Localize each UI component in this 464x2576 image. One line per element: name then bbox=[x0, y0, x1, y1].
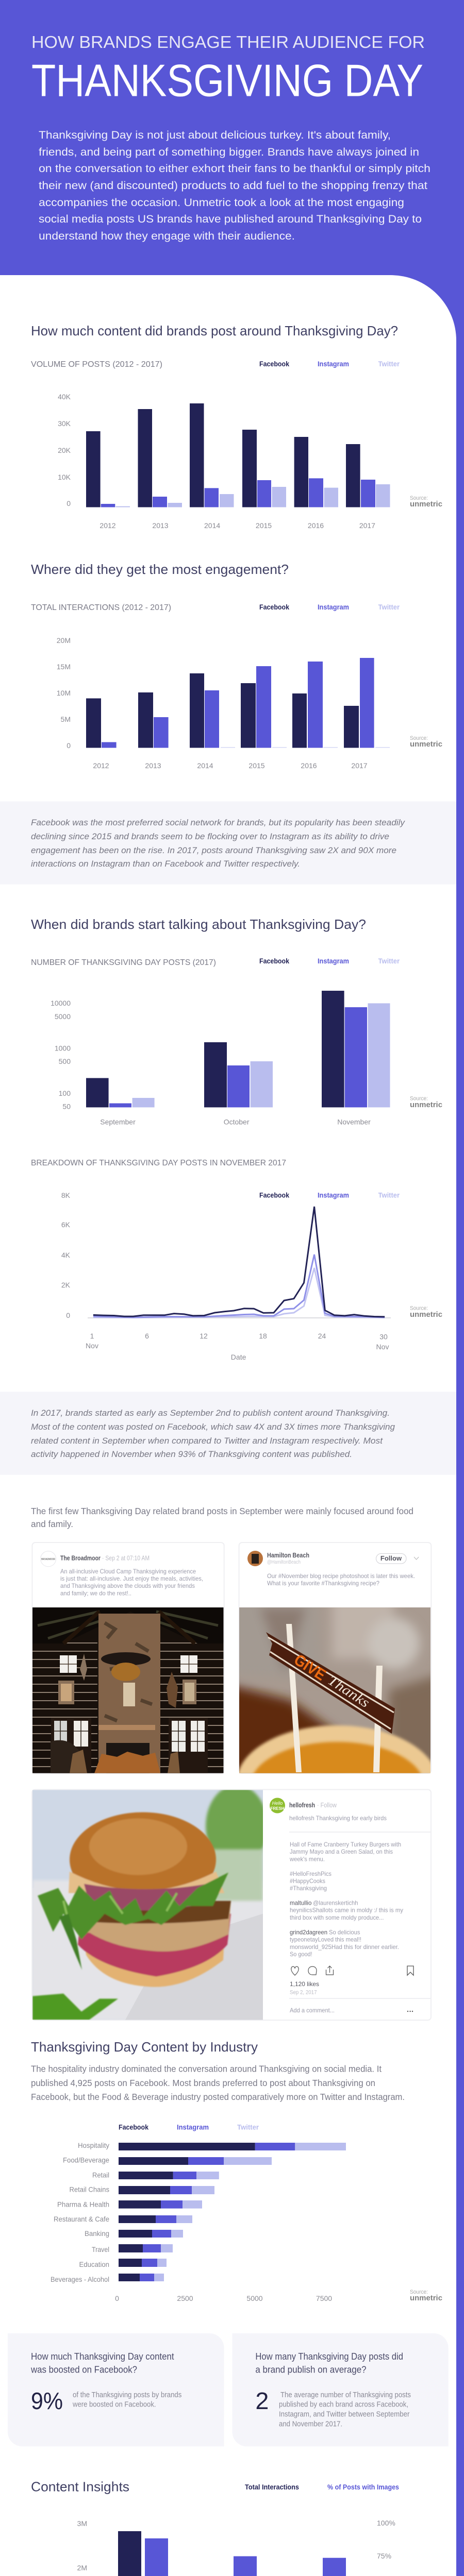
x axis: 2013 bbox=[152, 521, 169, 530]
x axis bbox=[86, 1332, 389, 1361]
x axis: 2012 bbox=[93, 761, 109, 770]
x axis: 2016 bbox=[308, 521, 324, 530]
x axis: 2017 bbox=[351, 761, 368, 770]
comment box: Add a comment... bbox=[290, 2007, 335, 2014]
x axis: 7500 bbox=[316, 2294, 332, 2302]
x axis: 30 bbox=[379, 1332, 388, 1341]
hero intro text: accompanies the occasion. Unmetric took a look at the most engaging bbox=[39, 197, 404, 209]
comments: #HelloFreshPics bbox=[290, 1870, 332, 1877]
post card: The Broadmoor bbox=[32, 1543, 224, 1773]
panel: boosted content bbox=[8, 2333, 224, 2446]
tweet text: What is your favorite #Thanksgiving recipe? bbox=[267, 1580, 379, 1587]
post card: Hamilton Beach bbox=[229, 1543, 440, 1839]
legend bbox=[259, 957, 400, 965]
account name: Hamilton Beach bbox=[267, 1551, 309, 1559]
left y axis: 3M bbox=[77, 2519, 87, 2528]
y axis: 0 bbox=[67, 741, 71, 750]
callout: facebook decline: engagement has been on the rise. In 2017, posts around Thanksgiving saw 2X and 90X more bbox=[31, 845, 396, 855]
legend: Facebook bbox=[259, 603, 289, 611]
heading: by industry: Thanksgiving Day Content by Industry bbox=[31, 2039, 258, 2055]
legend bbox=[259, 603, 400, 611]
y axis: 500 bbox=[59, 1057, 71, 1065]
photo: give thanks pie: GIVE bbox=[291, 1651, 329, 1684]
legend bbox=[245, 2483, 399, 2491]
chart: content insights bbox=[77, 2483, 442, 2576]
hero intro text: on the conversation to either exhort their fans to be thankful or simply pitch bbox=[39, 163, 430, 175]
text: by industry bbox=[31, 2064, 405, 2102]
x axis: 2016 bbox=[301, 761, 317, 770]
chart: content by industry bbox=[51, 2124, 442, 2302]
callout: facebook decline: Facebook was the most preferred social network for brands, but its popularity has been steadily bbox=[31, 818, 406, 827]
post text: An all-inclusive Cloud Camp Thanksgiving experience bbox=[60, 1568, 196, 1575]
stat description: The average number of Thanksgiving posts bbox=[280, 2391, 411, 2399]
category labels: Pharma & Health bbox=[57, 2200, 109, 2208]
stat description: Instagram, and Twitter between September bbox=[279, 2411, 410, 2419]
caption: hellofresh Thanksgiving for early birds bbox=[289, 1815, 387, 1822]
x axis bbox=[100, 1118, 371, 1126]
category labels bbox=[51, 2141, 109, 2283]
stat: 2: 2 bbox=[255, 2387, 269, 2414]
legend: Twitter bbox=[378, 360, 400, 368]
category labels: Retail bbox=[92, 2171, 109, 2179]
chart: breakdown in november bbox=[31, 1159, 442, 1361]
bars bbox=[118, 2531, 346, 2576]
stat description: and November 2017. bbox=[279, 2420, 342, 2429]
panel question: was boosted on Facebook? bbox=[30, 2364, 137, 2375]
legend: Instagram bbox=[318, 603, 349, 611]
source bbox=[410, 735, 442, 749]
likes and date bbox=[290, 1980, 319, 1996]
callout: timing insight bbox=[0, 1392, 456, 1475]
source: Source: bbox=[410, 495, 428, 501]
likes and date: 1,120 likes bbox=[290, 1980, 319, 1988]
account name bbox=[267, 1551, 309, 1565]
category labels: Restaurant & Cafe bbox=[54, 2215, 109, 2223]
heading: content volume: How much content did brands post around Thanksgiving Day? bbox=[31, 323, 398, 338]
panel question bbox=[255, 2351, 403, 2375]
comments: monsworld_925Had this for dinner earlier. bbox=[290, 1943, 399, 1951]
account name: · Follow bbox=[317, 1802, 337, 1809]
x axis bbox=[115, 2294, 332, 2302]
y axis: 40K bbox=[58, 393, 71, 401]
x axis: Date bbox=[231, 1353, 246, 1361]
hero intro text: their new (and discounted) products to add fuel to the shopping frenzy that bbox=[39, 180, 427, 192]
legend: Facebook bbox=[259, 360, 289, 368]
hero intro text: friends, and being part of something bigger. Brands have always joined in bbox=[39, 146, 419, 158]
avatar bbox=[247, 1551, 263, 1566]
legend: % of Posts with Images bbox=[327, 2483, 399, 2491]
account name: hellofresh bbox=[289, 1801, 315, 1809]
bars bbox=[86, 991, 390, 1107]
callout: timing insight: Most of the content was posted on Facebook, which saw 4X and 3X times more Thanksgiving bbox=[31, 1422, 395, 1432]
text: by industry: Facebook, but the Food & Beverage industry posted comparatively more on Twitter and Instagram. bbox=[31, 2092, 405, 2102]
stat description: of the Thanksgiving posts by brands bbox=[73, 2391, 181, 2399]
legend: Twitter bbox=[378, 957, 400, 965]
hero intro text: understand how they engage with their audience. bbox=[39, 230, 295, 242]
hero intro text bbox=[39, 129, 430, 242]
callout: timing insight: activity happened in November when 93% of Thanksgiving content was published. bbox=[31, 1449, 352, 1459]
bars bbox=[86, 403, 390, 507]
x axis: 0 bbox=[115, 2294, 119, 2302]
photo: lodge interior bbox=[32, 1607, 224, 1773]
text: by industry: published 4,925 posts on Facebook. Most brands preferred to post about Thanksgiving on bbox=[31, 2078, 375, 2088]
bars bbox=[86, 658, 390, 748]
category labels: Banking bbox=[85, 2229, 109, 2238]
x axis: 2013 bbox=[145, 761, 161, 770]
category labels: Retail Chains bbox=[69, 2185, 109, 2194]
panel question bbox=[30, 2351, 174, 2375]
post header: The Broadmoor bbox=[60, 1554, 101, 1562]
x axis: 2014 bbox=[197, 761, 213, 770]
photo: turkey burger bbox=[32, 1790, 263, 2020]
post text: and family; we do the rest!.. bbox=[60, 1590, 131, 1597]
post card: HelloFresh bbox=[32, 1785, 431, 2020]
x axis: October bbox=[224, 1118, 250, 1126]
source: unmetric bbox=[410, 2294, 442, 2302]
chart: total interactions bbox=[31, 603, 442, 770]
y axis: 5000 bbox=[55, 1012, 71, 1021]
callout: facebook decline bbox=[0, 802, 456, 884]
comments: grind2dagreen bbox=[290, 1928, 327, 1936]
line series bbox=[88, 1207, 391, 1318]
y axis: 0 bbox=[67, 499, 71, 507]
comments: Jammy Mayo and a Green Salad, on this bbox=[290, 1848, 393, 1855]
x axis: 24 bbox=[318, 1332, 326, 1340]
y axis: 20M bbox=[57, 636, 71, 645]
x axis: 18 bbox=[259, 1332, 267, 1340]
action icons bbox=[291, 1966, 413, 1975]
left y axis bbox=[77, 2519, 87, 2576]
heading: content insights: Content Insights bbox=[31, 2479, 129, 2494]
y axis: 1000 bbox=[55, 1044, 71, 1052]
legend: Instagram bbox=[318, 957, 349, 965]
stat: 9%: 9% bbox=[31, 2387, 63, 2414]
comments: #Thanksgiving bbox=[290, 1885, 327, 1892]
post text bbox=[60, 1568, 203, 1597]
comments: So good! bbox=[290, 1951, 312, 1958]
comments: third box with some moldy produce... bbox=[290, 1914, 384, 1921]
y axis: 10000 bbox=[51, 999, 71, 1007]
y axis: 8K bbox=[61, 1191, 71, 1199]
y axis: 30K bbox=[58, 419, 71, 428]
comments: So delicious bbox=[329, 1928, 360, 1936]
comments: maltullio bbox=[290, 1899, 312, 1906]
legend: Instagram bbox=[318, 1192, 349, 1199]
source bbox=[410, 2289, 442, 2302]
right y axis bbox=[377, 2519, 395, 2576]
hero header bbox=[31, 32, 430, 242]
legend bbox=[119, 2124, 259, 2131]
y axis: 5M bbox=[61, 715, 71, 723]
callout: facebook decline: declining since 2015 and brands seem to be flocking over to Instagram as its ability to drive bbox=[31, 832, 389, 841]
x axis: 1 bbox=[90, 1332, 94, 1340]
y axis: 100 bbox=[59, 1089, 71, 1097]
avatar bbox=[41, 1551, 56, 1567]
comments: typeonetayLoved this meal!! bbox=[290, 1936, 361, 1943]
right y axis: 75% bbox=[377, 2552, 391, 2560]
category labels: Food/Beverage bbox=[63, 2156, 109, 2164]
panel question: How many Thanksgiving Day posts did bbox=[255, 2351, 403, 2362]
x axis bbox=[93, 761, 368, 770]
x axis bbox=[100, 521, 375, 530]
source: unmetric bbox=[410, 1310, 442, 1319]
legend: Instagram bbox=[177, 2124, 209, 2131]
panel question: How much Thanksgiving Day content bbox=[31, 2351, 174, 2362]
y axis: 15M bbox=[57, 663, 71, 671]
post text: and Thanksgiving above the clouds with your friends bbox=[60, 1582, 195, 1589]
x axis: 2015 bbox=[248, 761, 265, 770]
source: unmetric bbox=[410, 740, 442, 749]
follow button: Follow bbox=[380, 1554, 402, 1562]
source: Source: bbox=[410, 735, 428, 741]
y axis: 2K bbox=[61, 1281, 71, 1289]
y axis: 10K bbox=[58, 473, 71, 481]
category labels: Beverages - Alcohol bbox=[51, 2275, 109, 2283]
heading: timing: When did brands start talking about Thanksgiving Day? bbox=[31, 917, 366, 932]
legend bbox=[259, 1192, 400, 1199]
right y axis: 100% bbox=[377, 2519, 395, 2527]
x axis: 2015 bbox=[256, 521, 272, 530]
chart: number of posts by month bbox=[31, 957, 442, 1126]
heading: engagement: Where did they get the most engagement? bbox=[31, 562, 289, 577]
x axis: 2500 bbox=[177, 2294, 193, 2302]
source: unmetric bbox=[410, 500, 442, 509]
callout: timing insight: related content in September when compared to Twitter and Instagram respectively. Most bbox=[31, 1436, 383, 1446]
y axis: 0 bbox=[66, 1311, 70, 1319]
legend: Total Interactions bbox=[245, 2483, 299, 2491]
y axis bbox=[58, 393, 71, 507]
x axis: Nov bbox=[86, 1342, 98, 1350]
source bbox=[410, 1096, 442, 1109]
photo: give thanks pie: Thanks bbox=[325, 1672, 373, 1710]
x axis: 12 bbox=[200, 1332, 208, 1340]
comments: #HappyCooks bbox=[290, 1877, 325, 1885]
source: Source: bbox=[410, 1306, 428, 1312]
post text: is just that: all-inclusive. Just enjoy the meals, activities, bbox=[60, 1575, 203, 1582]
comments: heynilicsShallots came in moldy :/ this is my bbox=[290, 1907, 403, 1914]
chart: volume of posts bbox=[31, 360, 442, 530]
comments bbox=[289, 1841, 403, 1958]
text: by industry: The hospitality industry dominated the conversation around Thanksgiving on social media. It bbox=[31, 2064, 382, 2074]
source: unmetric bbox=[410, 1100, 442, 1109]
stacked bars bbox=[119, 2143, 346, 2281]
stat description bbox=[72, 2391, 181, 2409]
x axis: 2014 bbox=[204, 521, 220, 530]
chart subtitle: BREAKDOWN OF THANKSGIVING DAY POSTS IN NOVEMBER 2017 bbox=[31, 1159, 286, 1167]
legend: Twitter bbox=[378, 1192, 400, 1199]
callout: facebook decline: interactions on Instagram than on Facebook and Twitter respectively. bbox=[31, 859, 300, 869]
text: first posts intro: and family. bbox=[31, 1519, 73, 1529]
avatar bbox=[270, 1798, 285, 1814]
tweet text: Our #November blog recipe photoshoot is later this week. bbox=[267, 1572, 415, 1580]
panel question: a brand publish on average? bbox=[255, 2364, 367, 2375]
legend: Facebook bbox=[259, 957, 289, 965]
avatar: Hello bbox=[272, 1801, 283, 1806]
legend: Twitter bbox=[237, 2124, 259, 2131]
x axis: September bbox=[100, 1118, 136, 1126]
likes and date: Sep 2, 2017 bbox=[290, 1990, 317, 1996]
x axis: 5000 bbox=[246, 2294, 263, 2302]
x axis: Nov bbox=[376, 1343, 389, 1351]
avatar: FRESH bbox=[270, 1806, 285, 1811]
x axis: 2012 bbox=[100, 521, 116, 530]
text: first posts intro bbox=[31, 1506, 413, 1529]
legend: Twitter bbox=[378, 603, 400, 611]
y axis: 6K bbox=[61, 1221, 71, 1229]
legend: Facebook bbox=[259, 1192, 289, 1199]
y axis: 4K bbox=[61, 1251, 71, 1259]
text: first posts intro: The first few Thanksgiving Day related brand posts in September were mainly focused around food bbox=[31, 1506, 413, 1516]
y axis: 10M bbox=[57, 689, 71, 697]
source bbox=[410, 1306, 442, 1319]
photo: give thanks pie bbox=[239, 1607, 430, 1773]
legend bbox=[259, 360, 400, 368]
avatar: BROADMOOR bbox=[41, 1558, 55, 1561]
stat description: were boosted on Facebook. bbox=[72, 2401, 156, 2409]
account name: @HamiltonBeach bbox=[267, 1559, 301, 1565]
post header: · Sep 2 at 07:10 AM bbox=[102, 1554, 150, 1562]
category labels: Education bbox=[79, 2260, 109, 2268]
source: Source: bbox=[410, 2289, 428, 2295]
legend: Instagram bbox=[318, 360, 349, 368]
y axis bbox=[57, 636, 71, 750]
category labels: Hospitality bbox=[78, 2141, 109, 2149]
comments: @laurenskertichh bbox=[313, 1899, 358, 1906]
comments: Hall of Fame Cranberry Turkey Burgers with bbox=[290, 1841, 401, 1848]
chart subtitle: TOTAL INTERACTIONS (2012 - 2017) bbox=[31, 603, 171, 612]
callout: timing insight: In 2017, brands started as early as September 2nd to publish content around Thanksgiving. bbox=[31, 1408, 390, 1418]
left y axis: 2M bbox=[77, 2564, 87, 2572]
x axis: 6 bbox=[145, 1332, 149, 1340]
follow button bbox=[376, 1554, 419, 1564]
source bbox=[410, 495, 442, 509]
y axis bbox=[51, 999, 71, 1111]
stat description bbox=[279, 2391, 411, 2429]
tweet text bbox=[267, 1572, 415, 1587]
chart subtitle: NUMBER OF THANKSGIVING DAY POSTS (2017) bbox=[31, 958, 216, 967]
x axis: November bbox=[337, 1118, 371, 1126]
hero kicker: HOW BRANDS ENGAGE THEIR AUDIENCE FOR bbox=[31, 32, 425, 52]
source: Source: bbox=[410, 1096, 428, 1102]
hero title: THANKSGIVING DAY bbox=[31, 55, 423, 106]
y axis: 50 bbox=[62, 1103, 71, 1111]
x axis: 2017 bbox=[359, 521, 375, 530]
category labels: Travel bbox=[92, 2245, 109, 2253]
hero intro text: social media posts US brands have published around Thanksgiving Day to bbox=[39, 213, 422, 225]
comments: week's menu. bbox=[289, 1855, 325, 1862]
legend: Facebook bbox=[119, 2124, 148, 2131]
chart subtitle: VOLUME OF POSTS (2012 - 2017) bbox=[31, 360, 162, 369]
panel: average posts bbox=[233, 2333, 449, 2446]
y axis: 20K bbox=[58, 446, 71, 454]
y axis bbox=[61, 1191, 71, 1319]
hero intro text: Thanksgiving Day is not just about delicious turkey. It's about family, bbox=[39, 129, 391, 141]
account name bbox=[289, 1801, 337, 1809]
stat description: published by each brand across Facebook, bbox=[279, 2401, 408, 2409]
post header bbox=[60, 1554, 150, 1562]
